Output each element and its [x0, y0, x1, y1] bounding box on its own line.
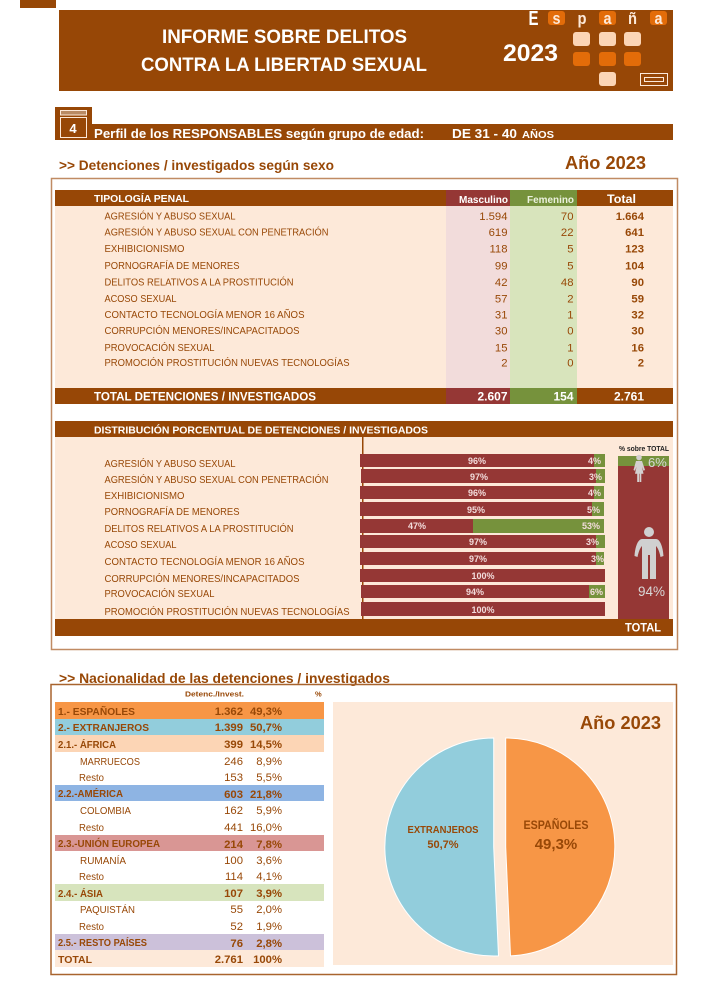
- detention counts: 107: [224, 888, 243, 900]
- percentages: 14,5%: [250, 739, 282, 751]
- logo: España letters: p: [578, 9, 586, 28]
- percentages: 5,5%: [256, 772, 282, 784]
- chart values: masculino: 94%: [466, 587, 484, 597]
- icon: man: [634, 527, 664, 579]
- pie label: extranjeros: [408, 824, 478, 851]
- row labels: Resto: [79, 823, 104, 834]
- column: masculino: 99: [495, 260, 508, 272]
- table total row: 154: [553, 390, 574, 404]
- percentages: 2,0%: [256, 904, 282, 916]
- column: masculino: 42: [495, 277, 508, 289]
- pie slice: españoles: [506, 738, 615, 956]
- logo: España letters: E: [528, 8, 538, 30]
- corner tab: [20, 0, 56, 8]
- percentages: 7,8%: [256, 839, 282, 851]
- chart values: masculino: 97%: [469, 537, 487, 547]
- table row labels: PROVOCACIÓN SEXUAL: [104, 341, 215, 354]
- detention counts: 2.761: [215, 954, 243, 966]
- table: tipología penal: [55, 190, 673, 404]
- table row labels: DELITOS RELATIVOS A LA PROSTITUCIÓN: [104, 276, 294, 288]
- chart labels: [104, 457, 350, 618]
- chart axis: [362, 437, 364, 619]
- logo: España letters: a: [604, 9, 612, 28]
- pie label: españoles: [524, 819, 589, 853]
- table header: TIPOLOGÍA PENAL: [94, 192, 190, 205]
- logo: España letters: ñ: [628, 9, 637, 28]
- section heading bar: 4: [69, 121, 77, 136]
- chart labels: PORNOGRAFÍA DE MENORES: [104, 505, 240, 518]
- logo: España letters: a: [654, 9, 663, 28]
- total column: [618, 446, 670, 619]
- heading: nacionalidad: >> Nacionalidad de las detenciones / investigados: [59, 671, 390, 686]
- detention counts: 1.362: [215, 706, 243, 718]
- chart values: femenino: 53%: [582, 521, 600, 531]
- percentages: 4,1%: [256, 871, 282, 883]
- row labels: RUMANÍA: [80, 854, 126, 867]
- column: total: 641: [625, 227, 644, 239]
- table total row: 2.607: [477, 390, 508, 404]
- percentages: 5,9%: [256, 805, 282, 817]
- column: total: 2: [638, 358, 644, 370]
- table row labels: PORNOGRAFÍA DE MENORES: [104, 259, 240, 272]
- chart total band: TOTAL: [625, 622, 661, 634]
- table row labels: EXHIBICIONISMO: [104, 244, 185, 255]
- table header: Femenino: [527, 195, 574, 206]
- pie label: extranjeros: 50,7%: [427, 839, 459, 851]
- percentages: 100%: [253, 954, 282, 966]
- heading: detenciones según sexo: >> Detenciones / investigados según sexo: [59, 158, 334, 173]
- icon: small rectangle: [640, 74, 668, 86]
- chart: distribución porcentual: [55, 421, 673, 636]
- pie heading: Año 2023: [580, 713, 661, 733]
- icon: woman: [634, 455, 645, 482]
- column: masculino: 1.594: [479, 211, 508, 223]
- title: INFORME SOBRE DELITOS: [162, 26, 407, 48]
- row labels: TOTAL: [58, 954, 93, 966]
- row labels: 2.2.-AMÉRICA: [58, 787, 123, 800]
- table header: Total: [607, 192, 636, 206]
- row labels: [58, 705, 160, 966]
- table row labels: PROMOCIÓN PROSTITUCIÓN NUEVAS TECNOLOGÍAS: [104, 356, 350, 369]
- percentages: 3,6%: [256, 855, 282, 867]
- row labels: PAQUISTÁN: [80, 903, 135, 916]
- pie label: extranjeros: EXTRANJEROS: [408, 824, 478, 836]
- chart bars: femenino: [473, 454, 605, 598]
- column: total: 16: [631, 342, 644, 354]
- column: femenino: 22: [561, 227, 574, 239]
- detention counts: 246: [224, 756, 243, 768]
- column headers: %: [315, 690, 322, 698]
- detention counts: 441: [224, 822, 243, 834]
- chart values: femenino: 3%: [586, 537, 599, 547]
- section heading bar: DE 31 - 40: [452, 127, 517, 141]
- row labels: 2.4.- ÁSIA: [58, 887, 103, 900]
- column: femenino: 70: [561, 211, 574, 223]
- chart heading: DISTRIBUCIÓN PORCENTUAL DE DETENCIONES / INVESTIGADOS: [94, 424, 428, 436]
- column: total: 1.664: [616, 211, 645, 223]
- chart values: masculino: 95%: [467, 505, 485, 515]
- panel: pie chart: [333, 702, 673, 965]
- row labels: 2.3.-UNIÓN EUROPEA: [58, 837, 160, 850]
- chart values: masculino: 97%: [470, 472, 488, 482]
- total column: 6%: [648, 455, 667, 470]
- table total row: [55, 388, 673, 404]
- column: total: 90: [631, 277, 644, 289]
- row labels: COLOMBIA: [80, 806, 131, 817]
- column: total: [616, 211, 645, 370]
- total column: 94%: [638, 583, 665, 599]
- chart values: femenino: 6%: [590, 587, 603, 597]
- chart bars: masculino: [360, 454, 605, 616]
- chart labels: CONTACTO TECNOLOGÍA MENOR 16 AÑOS: [104, 555, 305, 568]
- detention counts: 1.399: [215, 722, 243, 734]
- pie slice: extranjeros: [385, 738, 498, 956]
- chart labels: ACOSO SEXUAL: [104, 540, 177, 551]
- row labels: 1.- ESPAÑOLES: [58, 705, 135, 718]
- percentages: 3,9%: [256, 888, 282, 900]
- heading: año: Año 2023: [565, 153, 646, 173]
- chart values: femenino: 4%: [588, 456, 601, 466]
- column: total: 104: [625, 260, 645, 272]
- chart labels: CORRUPCIÓN MENORES/INCAPACITADOS: [104, 572, 300, 585]
- year: 2023: [503, 40, 558, 67]
- percentages: 49,3%: [250, 706, 282, 718]
- percentages: 50,7%: [250, 722, 282, 734]
- chart values: femenino: 5%: [587, 505, 600, 515]
- percentages: 21,8%: [250, 789, 282, 801]
- column: total: 123: [625, 244, 644, 256]
- table row labels: [104, 210, 350, 369]
- column headers: Detenc./Invest.: [185, 690, 244, 698]
- column: masculino: 2: [501, 358, 508, 370]
- chart values: masculino: 96%: [468, 488, 486, 498]
- panel frame: nacionalidad: [51, 684, 676, 974]
- detention counts: 100: [224, 855, 243, 867]
- chart values: masculino: [408, 456, 495, 615]
- column: femenino: 5: [567, 244, 574, 256]
- table row labels: AGRESIÓN Y ABUSO SEXUAL CON PENETRACIÓN: [104, 226, 328, 238]
- table total row: 2.761: [614, 390, 644, 404]
- pie label: españoles: ESPAÑOLES: [524, 819, 589, 832]
- logo: squares: [573, 32, 641, 86]
- title: [141, 26, 427, 76]
- column: total: 30: [631, 326, 644, 338]
- percentages: 2,8%: [256, 938, 282, 950]
- chart values: masculino: 100%: [471, 571, 495, 581]
- chart values: masculino: 97%: [469, 554, 487, 564]
- chart labels: DELITOS RELATIVOS A LA PROSTITUCIÓN: [104, 522, 294, 535]
- table row labels: CORRUPCIÓN MENORES/INCAPACITADOS: [104, 324, 300, 337]
- section heading bar: AÑOS: [522, 128, 554, 141]
- chart total band: [55, 619, 673, 636]
- header banner: [59, 8, 673, 91]
- column: femenino: 1: [567, 310, 574, 322]
- column: femenino: 1: [567, 342, 574, 354]
- table row labels: ACOSO SEXUAL: [104, 294, 177, 305]
- column: masculino: 57: [495, 294, 508, 306]
- detention counts: 162: [224, 805, 243, 817]
- table total row: TOTAL DETENCIONES / INVESTIGADOS: [94, 390, 316, 404]
- chart labels: PROVOCACIÓN SEXUAL: [104, 587, 215, 600]
- section heading bar: Perfil de los RESPONSABLES según grupo de edad:: [94, 127, 424, 141]
- column headers: [185, 690, 322, 698]
- title: CONTRA LA LIBERTAD SEXUAL: [141, 54, 427, 76]
- chart values: masculino: 96%: [468, 456, 486, 466]
- table header: [55, 190, 673, 206]
- column: total: 59: [631, 294, 644, 306]
- detention counts: 55: [230, 904, 243, 916]
- detention counts: 603: [224, 789, 243, 801]
- column: masculino: 31: [495, 310, 508, 322]
- column: femenino: 0: [567, 326, 574, 338]
- row backgrounds: [55, 702, 324, 967]
- detention counts: 153: [224, 772, 243, 784]
- table row labels: CONTACTO TECNOLOGÍA MENOR 16 AÑOS: [104, 308, 305, 321]
- chart values: femenino: [582, 456, 604, 597]
- detention counts: 114: [225, 871, 243, 883]
- chart labels: AGRESIÓN Y ABUSO SEXUAL: [104, 457, 236, 470]
- row labels: 2.1.- ÁFRICA: [58, 738, 116, 751]
- table header: Masculino: [459, 195, 508, 206]
- pie label: españoles: 49,3%: [535, 836, 577, 853]
- percentages: [250, 706, 282, 966]
- column: femenino: [561, 211, 574, 370]
- row labels: Resto: [79, 773, 104, 784]
- row labels: 2.- EXTRANJEROS: [58, 722, 149, 734]
- section heading bar: [55, 107, 673, 141]
- chart values: femenino: 4%: [588, 488, 601, 498]
- column: masculino: 619: [489, 227, 508, 239]
- detention counts: 52: [230, 921, 243, 933]
- detention counts: 214: [224, 839, 244, 851]
- table: nacionalidad: [55, 690, 324, 967]
- row labels: Resto: [79, 922, 104, 933]
- total column: % sobre TOTAL: [619, 446, 670, 453]
- row labels: 2.5.- RESTO PAÍSES: [58, 936, 147, 949]
- detention counts: [215, 706, 244, 966]
- chart labels: AGRESIÓN Y ABUSO SEXUAL CON PENETRACIÓN: [104, 473, 328, 486]
- logo: España letters: s: [552, 9, 560, 28]
- percentages: 8,9%: [256, 756, 282, 768]
- column: total: 32: [631, 310, 644, 322]
- chart values: masculino: 47%: [408, 521, 426, 531]
- chart heading: [55, 421, 673, 437]
- chart values: masculino: 100%: [471, 605, 495, 615]
- chart labels: PROMOCIÓN PROSTITUCIÓN NUEVAS TECNOLOGÍAS: [104, 605, 350, 618]
- column: femenino: 0: [567, 358, 574, 370]
- chart values: femenino: 3%: [591, 554, 604, 564]
- panel frame: sexo: [52, 178, 678, 650]
- column: masculino: 118: [489, 244, 508, 256]
- column: masculino: [479, 211, 508, 370]
- percentages: 16,0%: [250, 822, 282, 834]
- column: masculino: 15: [495, 342, 508, 354]
- chart values: femenino: 3%: [589, 472, 602, 482]
- row labels: Resto: [79, 872, 104, 883]
- chart labels: EXHIBICIONISMO: [104, 491, 185, 502]
- column: masculino: 30: [495, 326, 508, 338]
- column: femenino: 5: [567, 260, 574, 272]
- column: femenino: 48: [561, 277, 574, 289]
- logo: España letters: [528, 8, 667, 30]
- column: femenino: 2: [567, 294, 574, 306]
- detention counts: 76: [230, 938, 243, 950]
- percentages: 1,9%: [256, 921, 282, 933]
- detention counts: 399: [224, 739, 243, 751]
- table row labels: AGRESIÓN Y ABUSO SEXUAL: [104, 210, 236, 222]
- row labels: MARRUECOS: [80, 757, 140, 768]
